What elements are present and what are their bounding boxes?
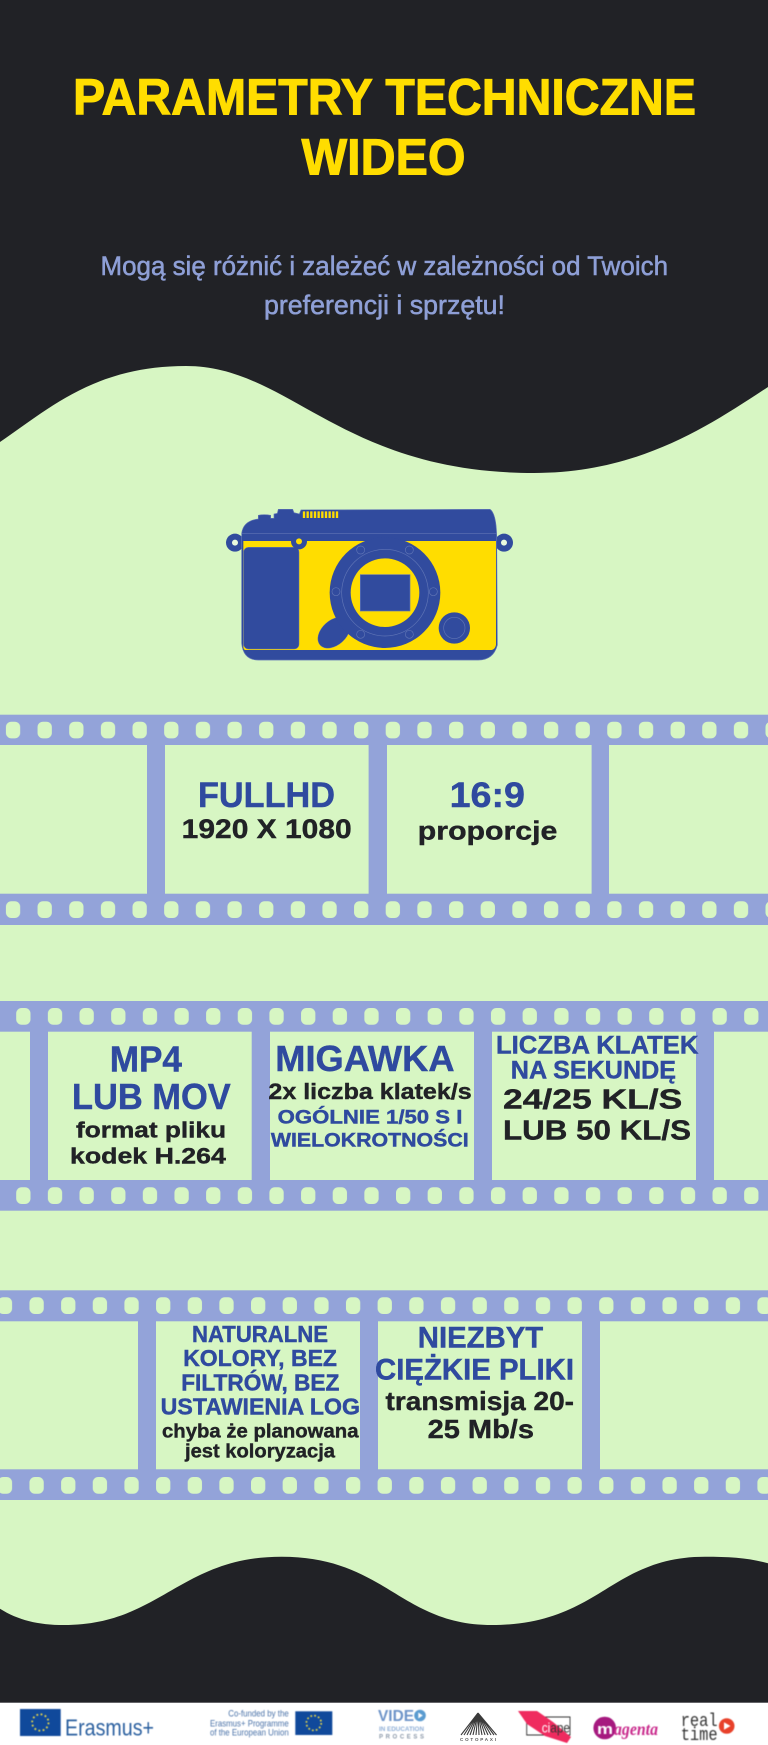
text: migawka (268, 1038, 472, 1152)
text: migawka: WIELOKROTNOŚCI (271, 1128, 469, 1152)
camera front yellow panel (243, 541, 496, 650)
camera grip (244, 547, 299, 649)
camera dial (301, 510, 339, 519)
text: liczba klatek na sekunde: 24/25 KL/S (503, 1084, 682, 1115)
text: niezbyt ciezkie pliki (375, 1322, 574, 1444)
title: PARAMETRY TECHNICZNE (73, 68, 696, 126)
logo: ciape: ciape (542, 1719, 570, 1735)
panel: film strip 3 (0, 1290, 768, 1500)
text: niezbyt ciezkie pliki: transmisja 20- (386, 1386, 574, 1416)
text: naturalne kolory: USTAWIENIA LOG (161, 1394, 360, 1420)
text: FULLHD: 1920 X 1080 (182, 814, 352, 844)
logo: co-funded by the Erasmus+ Programme: Co-funded by the (228, 1709, 289, 1719)
icon: camera (226, 509, 513, 660)
text: niezbyt ciezkie pliki: CIĘŻKIE PLIKI (375, 1353, 574, 1386)
camera button (439, 612, 470, 644)
text: MP4 lub MOV: kodek H.264 (70, 1143, 227, 1168)
bottom dark wave (0, 1557, 768, 1703)
text: 16:9: proporcje (418, 815, 557, 845)
logo: Erasmus+: Erasmus+ (65, 1715, 154, 1741)
subtitle: preferencji i sprzętu! (264, 290, 505, 320)
text: MP4 lub MOV: MP4 (110, 1039, 182, 1080)
camera front bolt (291, 533, 307, 549)
camera strap lugs (226, 534, 513, 552)
logo: Video in education process: IN EDUCATION (379, 1726, 424, 1733)
logo: Cotopaxi: COTOPAXI (460, 1737, 496, 1742)
logo: co-funded by the Erasmus+ Programme: of the European Union (210, 1727, 289, 1737)
text: FULLHD (182, 776, 352, 844)
logo: Magenta: m (597, 1721, 613, 1738)
text: migawka: OGÓLNIE 1/50 S I (278, 1104, 462, 1128)
text: naturalne kolory: jest koloryzacja (184, 1441, 335, 1463)
title: WIDEO (302, 128, 466, 186)
logo: Video in education process: VIDE (378, 1708, 414, 1725)
logo: Video in education process: PROCESS (379, 1734, 424, 1740)
title (73, 68, 696, 186)
text: migawka: 2x liczba klatek/s (268, 1079, 472, 1104)
panel: film strip 1 (0, 715, 768, 925)
logo: real time: real (681, 1712, 718, 1732)
camera latch (312, 611, 356, 654)
text: FULLHD: FULLHD (198, 776, 335, 815)
text: MP4 lub MOV: format pliku (76, 1117, 226, 1142)
text: 16:9 (418, 776, 557, 845)
footer logo strip (0, 1703, 768, 1745)
logo: co-funded by the Erasmus+ Programme (210, 1709, 332, 1737)
text: liczba klatek na sekunde: LICZBA KLATEK (496, 1031, 698, 1059)
logo: Cotopaxi (460, 1713, 496, 1742)
logo: Video in education process (378, 1708, 426, 1740)
text: MP4 lub MOV: LUB MOV (72, 1076, 231, 1117)
text: MP4 lub MOV (70, 1039, 231, 1168)
text: naturalne kolory: KOLORY, BEZ (183, 1345, 337, 1371)
logo: ciape (518, 1711, 571, 1743)
subtitle: Mogą się różnić i zależeć w zależności od Twoich (100, 251, 668, 281)
camera body (242, 509, 497, 660)
text: naturalne kolory (161, 1321, 360, 1463)
panel: film strip 2 (0, 1001, 768, 1211)
logo: Erasmus+ (20, 1709, 154, 1741)
text: naturalne kolory: NATURALNE (192, 1321, 328, 1347)
text: liczba klatek na sekunde: NA SEKUNDĘ (511, 1056, 676, 1084)
subtitle (100, 251, 668, 320)
camera lens mount (330, 537, 440, 648)
text: naturalne kolory: FILTRÓW, BEZ (181, 1369, 339, 1396)
text: naturalne kolory: chyba że planowana (162, 1420, 359, 1442)
logo: Magenta (593, 1717, 658, 1739)
logo: co-funded by the Erasmus+ Programme: Erasmus+ Programme (210, 1718, 289, 1728)
logo: Magenta: agenta (614, 1719, 658, 1739)
text: liczba klatek na sekunde: LUB 50 KL/S (503, 1115, 691, 1146)
text: niezbyt ciezkie pliki: 25 Mb/s (428, 1414, 534, 1444)
logo: real time (681, 1712, 734, 1745)
text: niezbyt ciezkie pliki: NIEZBYT (418, 1322, 543, 1355)
text: migawka: MIGAWKA (275, 1038, 454, 1079)
camera top line (242, 532, 497, 534)
text: liczba klatek na sekunde (496, 1031, 698, 1146)
text: 16:9: 16:9 (450, 776, 525, 815)
top dark wave header (0, 0, 768, 473)
